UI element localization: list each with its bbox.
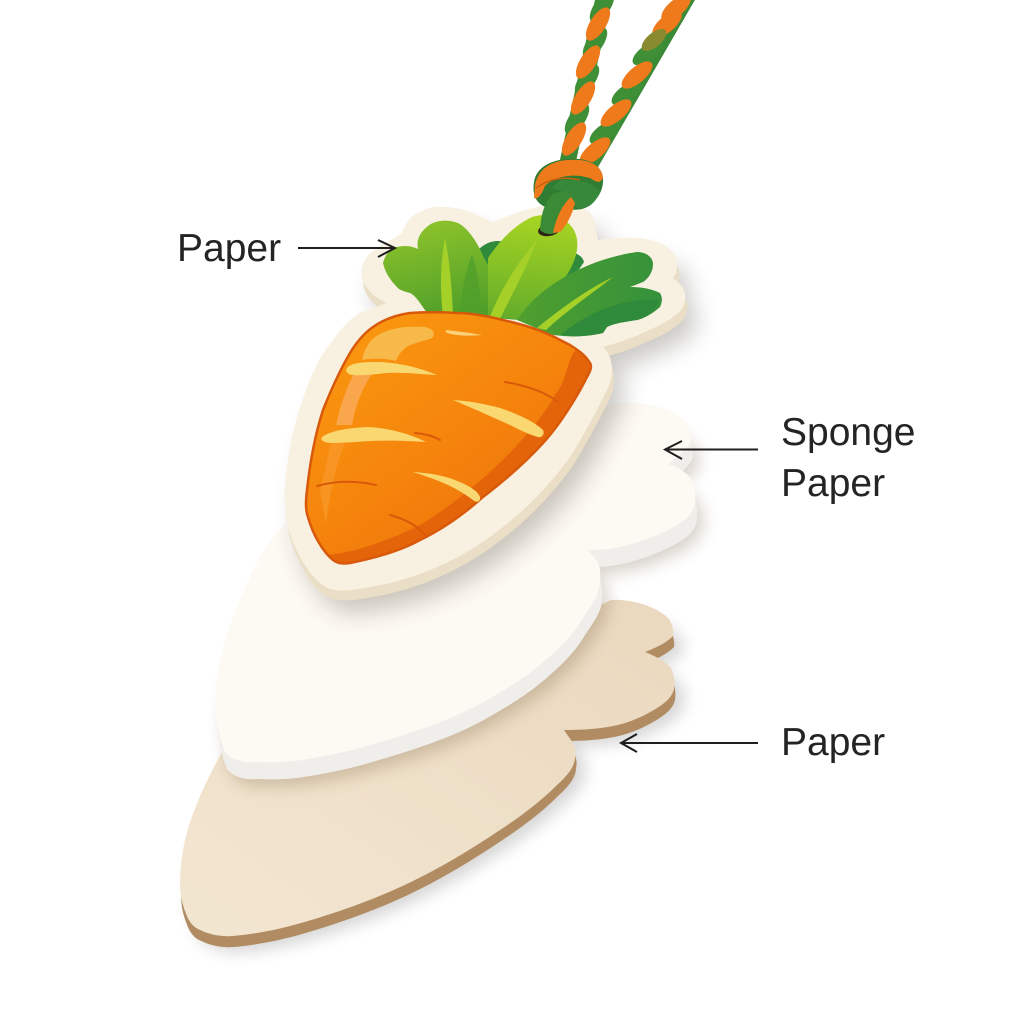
string hole bbox=[537, 222, 561, 238]
label: sponge paper bbox=[665, 411, 915, 505]
arrow: to top paper layer bbox=[298, 240, 395, 257]
right strand bbox=[575, 0, 695, 169]
label: top paper: Paper bbox=[177, 227, 281, 270]
label: bottom paper: Paper bbox=[781, 721, 885, 764]
arrow: to sponge layer bbox=[665, 441, 758, 459]
label: top paper bbox=[177, 227, 395, 270]
top paper layer bbox=[285, 204, 697, 612]
label: bottom paper bbox=[621, 721, 885, 764]
bottom paper layer bbox=[180, 600, 684, 952]
carrot body bbox=[306, 312, 600, 575]
left strand bbox=[557, 0, 619, 165]
knot bbox=[534, 159, 603, 234]
label: sponge paper: Sponge bbox=[781, 411, 915, 454]
diagram: layered carrot ornament bbox=[180, 0, 914, 958]
label: sponge paper: Paper bbox=[781, 462, 885, 505]
hanging cord bbox=[534, 0, 695, 234]
middle sponge layer bbox=[215, 403, 703, 786]
arrow: to bottom paper layer bbox=[621, 734, 758, 752]
carrot leaves bbox=[383, 215, 662, 336]
carrot groove lines bbox=[317, 382, 558, 535]
carrot highlights bbox=[321, 327, 544, 502]
